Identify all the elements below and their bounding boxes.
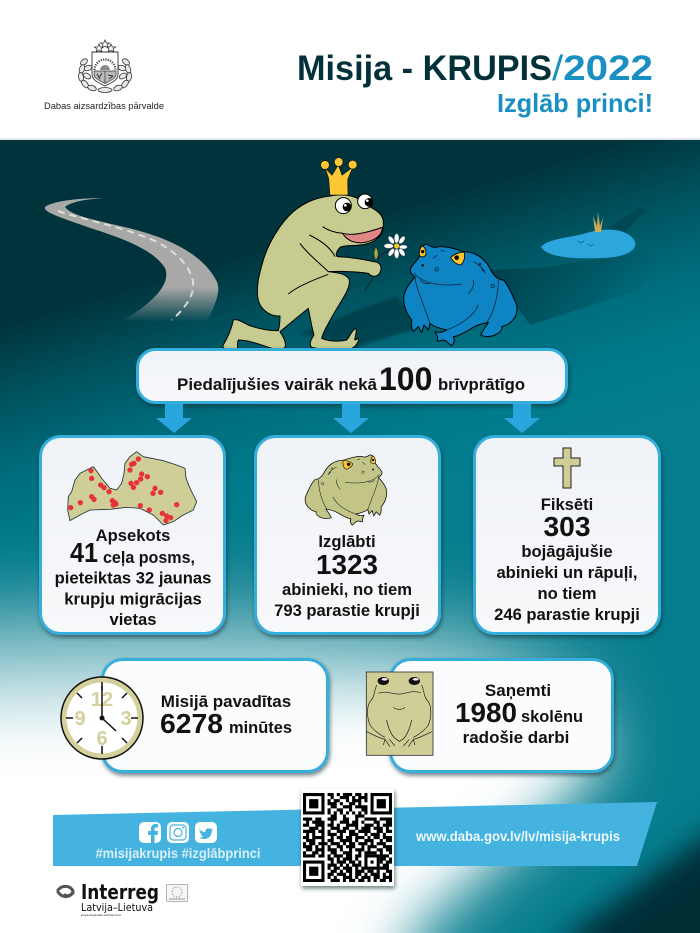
card text [160, 692, 292, 739]
card text: 303 [544, 511, 590, 542]
icon: map of Latvia [68, 452, 197, 525]
card text: vietas [109, 610, 157, 629]
panel: dead amphibians [474, 436, 660, 634]
footer bar [53, 802, 657, 866]
arrow 2 [333, 404, 369, 433]
card text: Fiksēti [541, 495, 593, 514]
card text: 41 [70, 537, 98, 568]
card text: 1323 [316, 549, 378, 580]
card text: Apsekots [96, 526, 170, 545]
card text: no tiem [537, 584, 597, 603]
icon: twitter [195, 822, 217, 843]
ground shadows [300, 297, 413, 348]
icon: facebook [139, 822, 161, 843]
subtitle: Izglāb princi! [497, 88, 653, 118]
shield [92, 52, 118, 86]
panel: rescued amphibians [256, 436, 440, 634]
card text [274, 532, 420, 620]
icon: clock: 9 [74, 708, 86, 730]
card text: bojāgājušie [521, 542, 613, 561]
card text [455, 681, 583, 747]
panel: student works [366, 660, 612, 772]
icon: toad [305, 455, 387, 525]
oak branches [78, 58, 132, 92]
icon: clock: 3 [120, 708, 132, 730]
card text [494, 495, 640, 624]
icon: instagram [167, 822, 189, 843]
crown [321, 158, 357, 195]
organisation name: Dabas aizsardzības pārvalde [44, 101, 164, 112]
EU flag [166, 884, 188, 902]
website url: www.daba.gov.lv/lv/misija-krupis [415, 829, 620, 844]
pond [541, 208, 646, 258]
title year: /2022 [552, 49, 653, 88]
logo swirl [58, 886, 73, 897]
card text: Izglābti [318, 532, 376, 551]
logo wordmark: Interreg [81, 880, 159, 904]
arrow 3 [504, 404, 540, 433]
card text: abinieki, no tiem [282, 580, 412, 599]
card text: minūtes [229, 718, 292, 737]
QR code [301, 789, 394, 886]
blue toad [404, 244, 517, 346]
panel: minutes [61, 660, 328, 772]
card text: 1980 [455, 697, 517, 728]
card text: pieteiktas 32 jaunas [55, 568, 211, 588]
banner: volunteers [138, 350, 566, 402]
card text: Misijā pavadītas [161, 692, 291, 711]
card text: 6278 [160, 708, 223, 739]
flower [365, 234, 407, 291]
card text: radošie darbi [463, 728, 569, 747]
frog prince and toad illustration [223, 158, 517, 352]
arrow 1 [156, 404, 192, 433]
card text: 246 parastie krupji [494, 605, 640, 624]
card text: krupju migrācijas [64, 590, 202, 608]
hashtags: #misijakrupis #izglābprinci [96, 846, 260, 861]
card text [55, 526, 211, 629]
toad ground shadow [490, 250, 660, 325]
card text: abinieki un rāpuļi, [496, 563, 638, 582]
card text: skolēnu [521, 707, 583, 726]
social icons [139, 822, 217, 843]
banner number: 100 [379, 361, 432, 397]
header background [0, 0, 700, 140]
emblem of Latvia [78, 40, 132, 92]
banner text: Piedalījušies vairāk nekā [177, 375, 378, 394]
title: Misija - KRUPIS [297, 49, 552, 88]
panel: road sections [40, 436, 224, 634]
icon: clock [61, 677, 143, 759]
road [45, 198, 218, 322]
stars [94, 40, 116, 52]
card text: ceļa posms, [103, 548, 195, 567]
banner text end: brīvprātīgo [438, 375, 525, 394]
logo programme name: Latvija–Lietuva [81, 902, 153, 914]
icon: frog picture [366, 672, 433, 755]
card text: 793 parastie krupji [274, 601, 420, 620]
Interreg logo [58, 880, 188, 917]
logo tagline: Eiropas Reģionālās attīstības fonds [81, 914, 122, 917]
frog prince [223, 194, 383, 352]
icon: clock: 6 [96, 728, 108, 750]
icon: cross [554, 448, 580, 488]
card text: Saņemti [485, 681, 551, 700]
icon: clock: 12 [91, 689, 113, 711]
